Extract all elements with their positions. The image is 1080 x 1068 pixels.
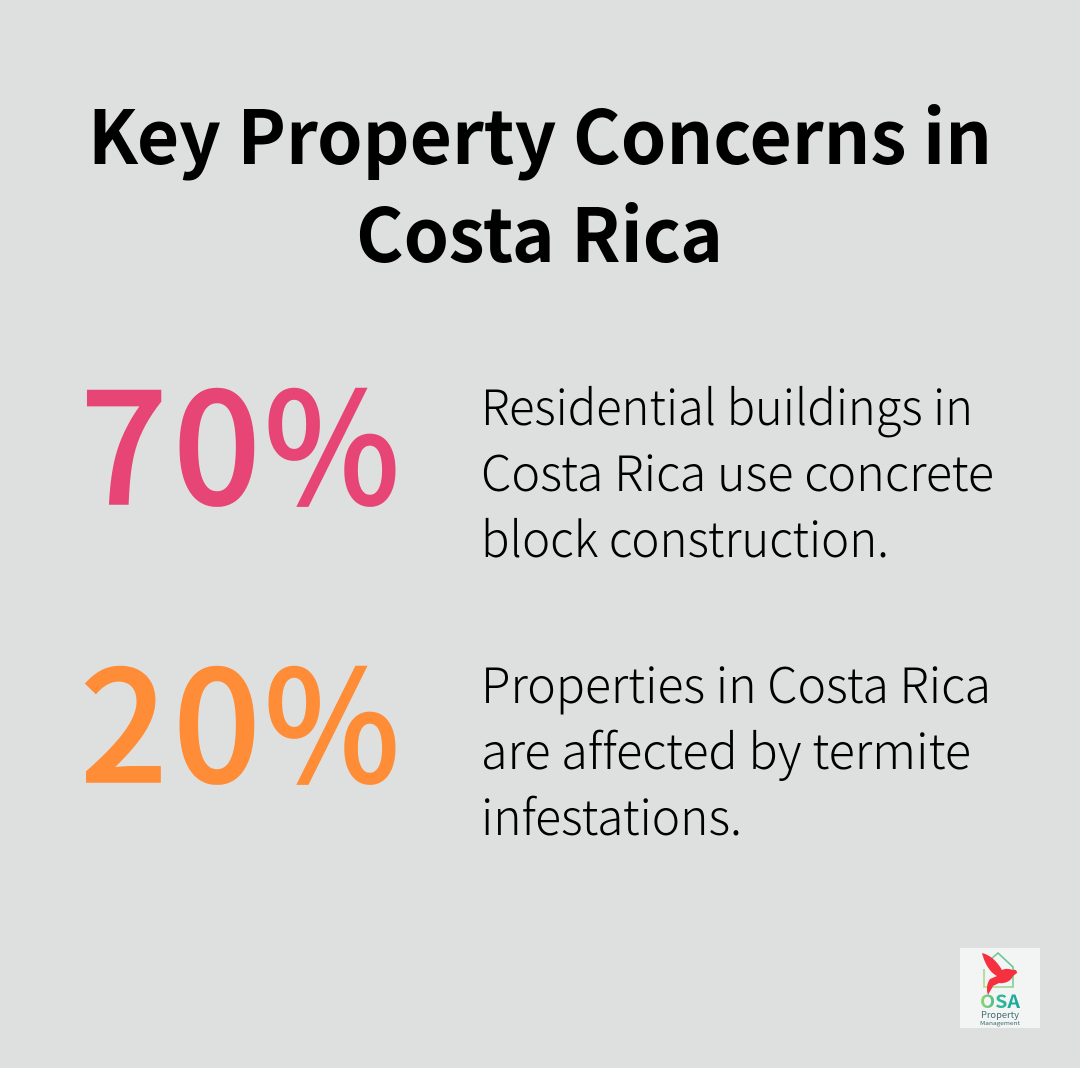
stat: 70% value: 70 xyxy=(80,326,261,549)
icon: red bird xyxy=(982,953,1017,995)
stat: 70% description xyxy=(481,369,994,572)
stat: 70% value: % xyxy=(264,326,400,549)
logo tagline: Management xyxy=(980,1019,1020,1027)
stat: 20% value: % xyxy=(264,604,400,827)
logo: OSA Property Management xyxy=(960,948,1040,1028)
stat: 20% description: are affected by termite xyxy=(481,713,971,784)
logo subtitle: Property xyxy=(981,1008,1019,1021)
stat: 70% description: block construction. xyxy=(481,501,889,572)
stat: 20% description xyxy=(481,647,991,850)
title: Costa Rica xyxy=(356,177,723,284)
stat: 20% value: 20 xyxy=(80,604,261,827)
stat: 20% value xyxy=(80,604,400,827)
stat: 70% description: Residential buildings in xyxy=(481,369,973,440)
stat: 20% description: Properties in Costa Rica xyxy=(481,647,991,718)
stat: 70% description: Costa Rica use concrete xyxy=(481,435,994,506)
title: Key Property Concerns in xyxy=(88,79,992,186)
logo wordmark: OSA xyxy=(980,988,1020,1014)
icon: house outline xyxy=(984,953,1013,987)
stat: 20% description: infestations. xyxy=(481,779,742,850)
title xyxy=(88,79,992,284)
stat: 70% value xyxy=(80,326,400,549)
